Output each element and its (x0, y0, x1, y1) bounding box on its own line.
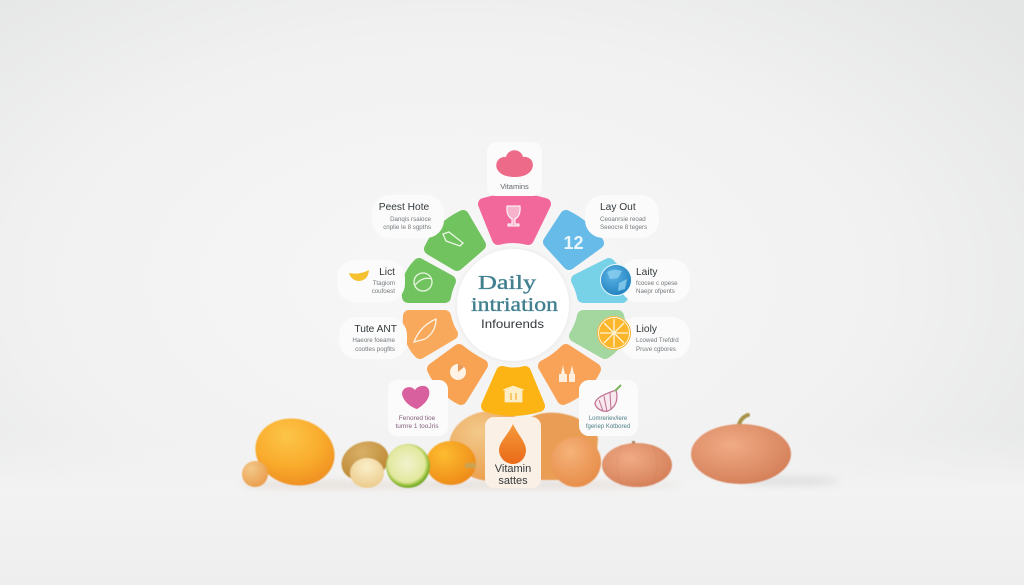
card: onion (579, 380, 638, 436)
fruit: large peach behind left (449, 411, 535, 481)
card: Vitamins: Vitamins (500, 182, 529, 191)
segment: green circle (407, 264, 450, 297)
card: Lict: Lict (379, 267, 395, 278)
fruit row (240, 410, 840, 494)
icon: pink heart (402, 386, 429, 409)
card: Lioly: Lioly (636, 324, 658, 335)
card: Peest Hote: Peest Hote (379, 202, 430, 213)
hub title line two: intriation (471, 294, 558, 316)
segment: blue 12: 12 (563, 233, 584, 253)
card: Lict (337, 260, 405, 302)
card: Tute ANT (339, 317, 407, 359)
card: Tute ANT: Haeore foeame (352, 337, 396, 344)
card: Laity (620, 259, 690, 302)
card: Tute ANT: Tute ANT (354, 324, 397, 335)
fruit: large peach behind right (530, 413, 598, 480)
segment: blue 12 (549, 216, 598, 264)
center hub (457, 249, 569, 361)
card: Tute ANT: coottes pogfits (355, 346, 395, 353)
card: Lioly: Pruve cgbores (636, 346, 676, 353)
fruit: large pumpkin (691, 415, 791, 484)
segment: orange bottles (544, 350, 595, 399)
icon: orange slice (598, 316, 630, 350)
segment: pink trophy (484, 200, 545, 239)
fruit: pale halved fruit (350, 458, 384, 488)
card: Lioly (620, 317, 690, 359)
fruit: brown fig (336, 435, 394, 487)
radial wheel (407, 200, 622, 410)
card: Lict: Ttagiom (373, 280, 395, 287)
card: Laity: Naepr ofpents (636, 288, 675, 295)
fruit: small apricot (242, 461, 268, 487)
card: Vitamin sattes: sattes (498, 475, 528, 487)
card: Lay Out: Seeocre 8 tegers (600, 224, 647, 231)
card: onion: fgeriep Kotbored (586, 424, 630, 430)
card: Peest Hote: cnplie le 8 sgpths (383, 224, 431, 231)
card: Lay Out: Ceoanrsie reoad (600, 216, 646, 223)
card: heart (388, 380, 448, 436)
card: Peest Hote: Danqis rsaioce (390, 216, 432, 223)
fruit shadows (240, 477, 840, 488)
segment: yellow house (487, 372, 539, 410)
icon: blue globe (600, 264, 632, 296)
fruit: halved lime (386, 444, 430, 488)
icon: pink brain cloud (496, 150, 533, 177)
card: Laity: fcocee c opese (636, 280, 678, 287)
fruit: mango (426, 441, 476, 485)
segment: light green (575, 316, 620, 353)
card: Vitamins (487, 142, 542, 196)
icon: striped onion (595, 385, 621, 412)
card: Lioly: Lcowed Trefdrd (636, 337, 679, 344)
segment: green leaf (430, 216, 480, 265)
icon: yellow citrus wedge (349, 270, 369, 281)
card: Vitamin sattes: Vitamin (495, 463, 531, 475)
card: Laity: Laity (636, 267, 658, 278)
card: Lict: coufoest (372, 288, 395, 295)
card: onion: Lomreriev/lere (589, 416, 628, 422)
card: heart: tumre 1 tooJris (396, 423, 439, 430)
card: Vitamin sattes (485, 417, 541, 488)
fruit: large orange (248, 410, 342, 494)
card: Lay Out (585, 195, 659, 238)
fruit: mango stem (465, 463, 476, 468)
card: heart: Fenored tioe (399, 415, 436, 422)
segment: orange pie (433, 350, 482, 399)
fruit: small pumpkin (602, 441, 672, 487)
fruit: peach sphere (551, 437, 601, 487)
segment: orange rocket (409, 316, 452, 353)
card: Peest Hote (372, 195, 444, 238)
icon: orange droplet (499, 424, 526, 464)
hub subtitle: Infourends (481, 317, 544, 331)
segment: cyan (577, 264, 622, 297)
card: Lay Out: Lay Out (600, 202, 636, 213)
hub title: Daily (478, 272, 536, 294)
